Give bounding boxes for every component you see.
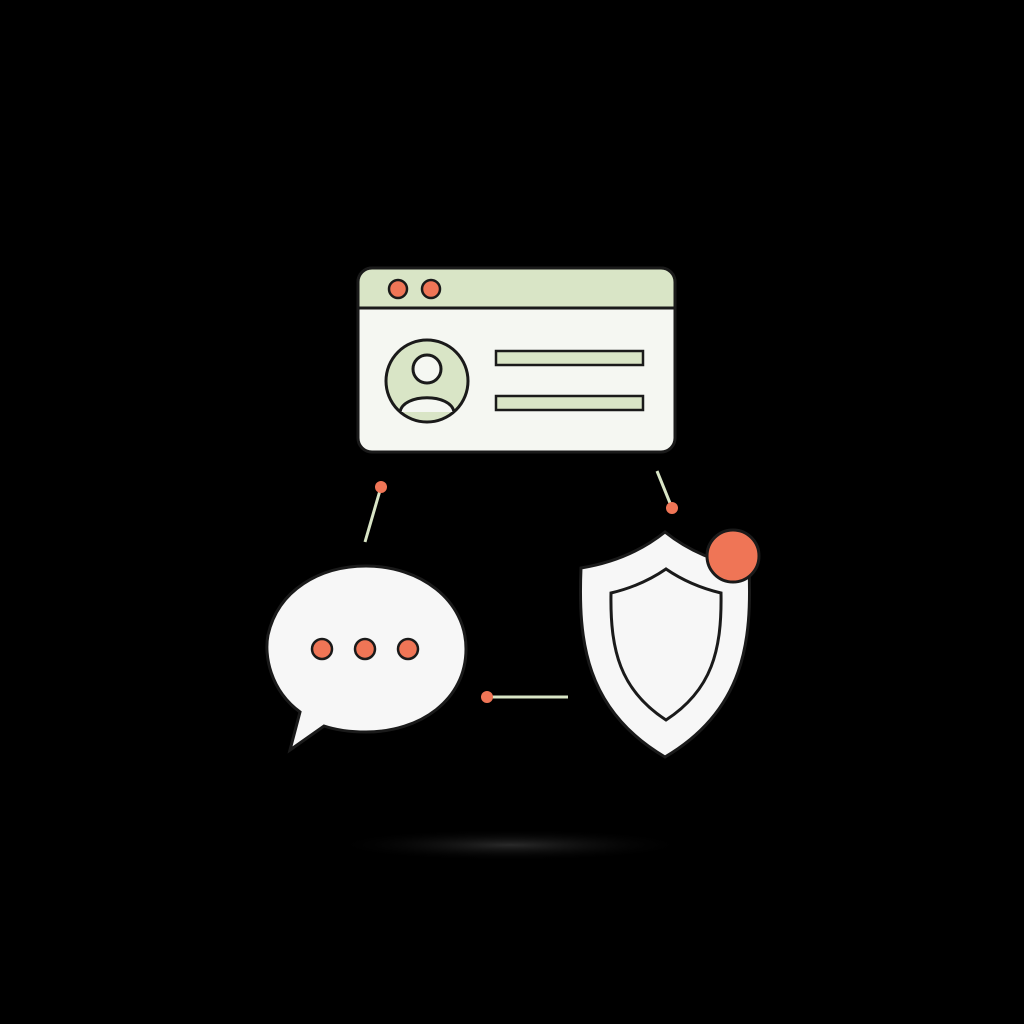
text bars [496, 351, 643, 410]
icon: avatar [386, 340, 468, 422]
icon: speech bubble [267, 566, 466, 750]
shadow [330, 829, 690, 861]
icon: shield [580, 530, 759, 757]
browser window profile card [358, 268, 675, 452]
connector: window to shield [657, 471, 678, 514]
connector: bubble to shield [481, 691, 568, 703]
connector: window to bubble [365, 481, 387, 542]
window dots [389, 280, 440, 298]
badge [707, 530, 759, 582]
